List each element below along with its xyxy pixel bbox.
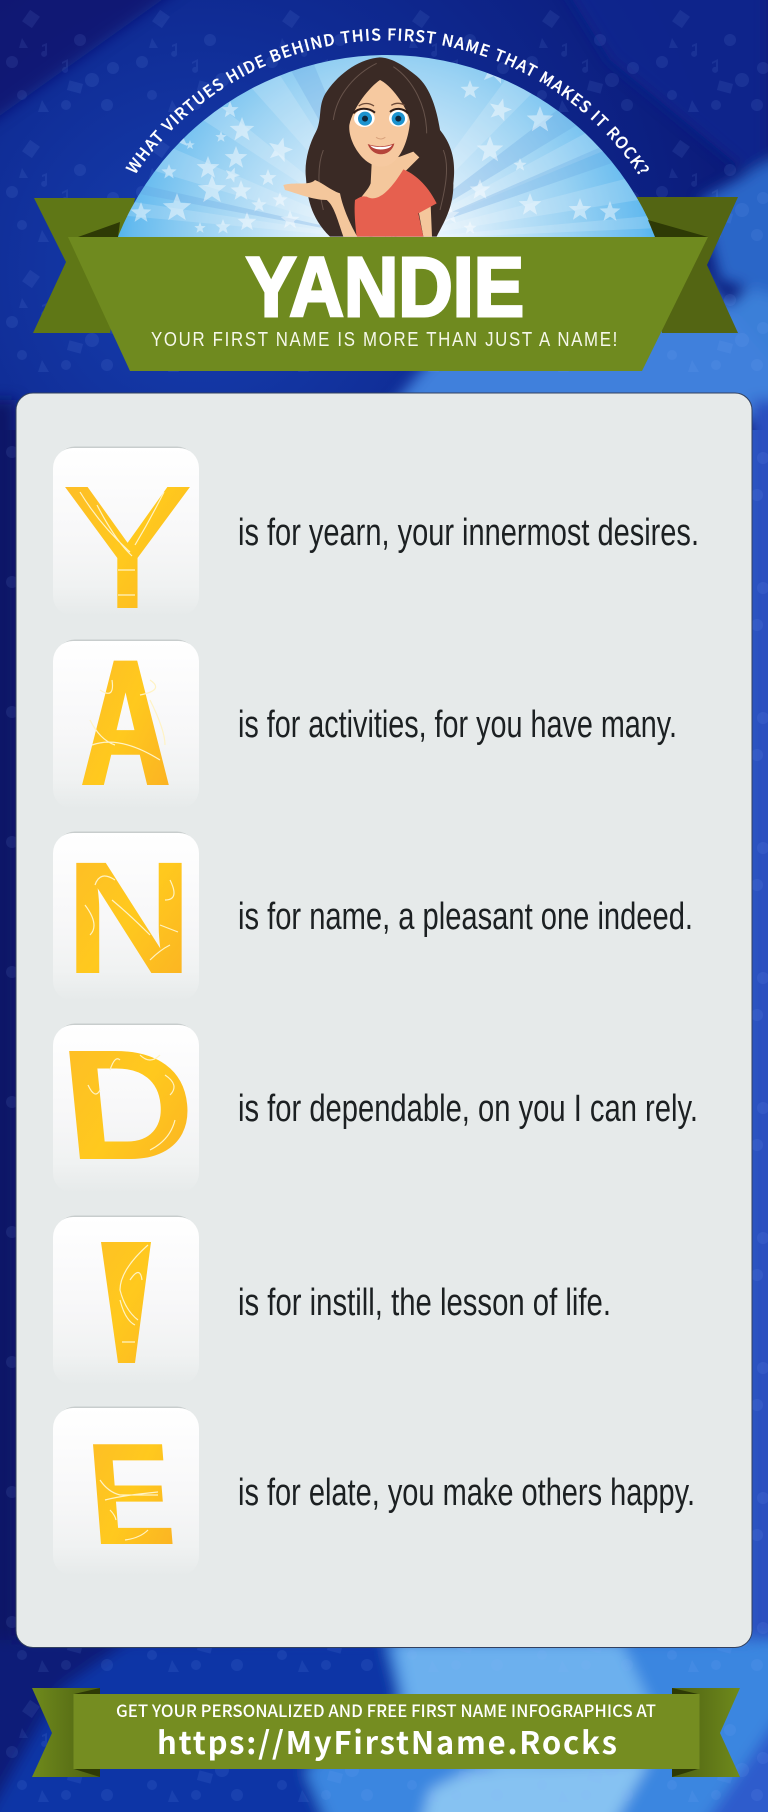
footer ribbon xyxy=(32,1688,740,1777)
letter D: D xyxy=(54,1018,204,1193)
panel: letters and meanings xyxy=(16,393,752,1648)
row Y xyxy=(53,446,699,644)
tile A xyxy=(53,640,199,809)
letter I xyxy=(101,1242,151,1363)
letter Y: Y xyxy=(63,451,192,644)
tile E xyxy=(53,1406,199,1576)
meaning I: is for instill, the lesson of life. xyxy=(238,1282,611,1324)
character: smiling woman with long brown hair xyxy=(283,57,454,237)
letter N: N xyxy=(64,828,194,1007)
tile I xyxy=(53,1216,199,1385)
eyes xyxy=(353,103,408,127)
footer ribbon tails xyxy=(32,1688,740,1777)
letter E: E xyxy=(82,1413,180,1575)
tile Y xyxy=(53,446,199,616)
footer ribbon band xyxy=(74,1694,700,1769)
row D xyxy=(53,1018,698,1193)
hair strands xyxy=(319,63,447,210)
curved headline: WHAT VIRTUES HIDE BEHIND THIS FIRST NAME THAT MAKES IT ROCK? xyxy=(125,28,649,174)
subtitle: YOUR FIRST NAME IS MORE THAN JUST A NAME! xyxy=(151,329,619,351)
footer ribbon folds xyxy=(74,1688,698,1777)
smile xyxy=(368,137,394,154)
body: neck and right arm xyxy=(360,152,432,237)
red shirt xyxy=(355,169,437,237)
letter I: I xyxy=(67,1204,185,1401)
footer url: https://MyFirstName.Rocks xyxy=(157,1718,617,1763)
main header ribbon xyxy=(68,237,708,371)
row E xyxy=(53,1406,695,1576)
row A xyxy=(53,628,677,819)
hair xyxy=(306,57,454,237)
face xyxy=(349,80,410,167)
row I xyxy=(53,1216,608,1363)
ribbon folds: header xyxy=(78,220,708,237)
tile N xyxy=(53,832,199,1001)
name title: YANDIE xyxy=(246,240,524,334)
row N xyxy=(53,828,693,1007)
ribbon back tails: header xyxy=(33,197,738,333)
dome with sky burst and stars xyxy=(118,55,655,237)
tile D xyxy=(53,1024,199,1193)
hand and arm xyxy=(283,180,357,237)
letter A: A xyxy=(82,628,169,819)
footer call to action: GET YOUR PERSONALIZED AND FREE FIRST NAME INFOGRAPHICS AT xyxy=(116,1697,656,1722)
